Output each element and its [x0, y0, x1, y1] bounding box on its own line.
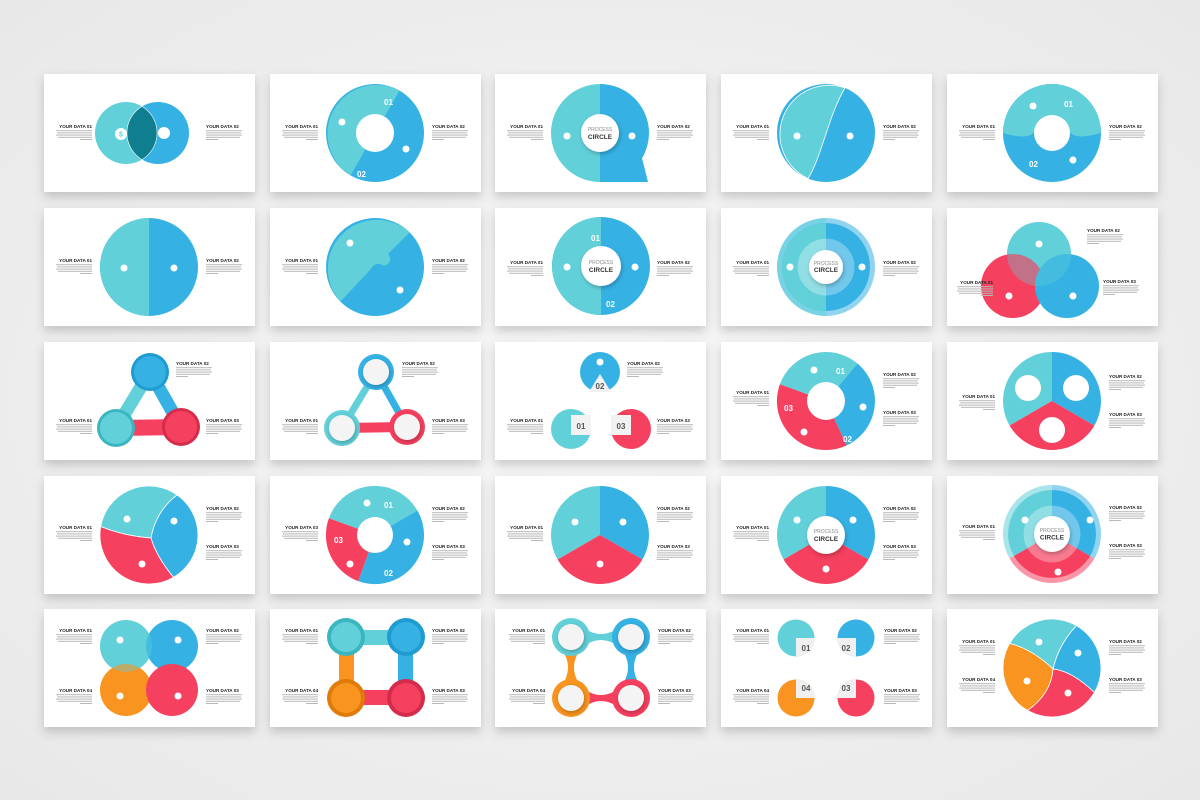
slide 17: three-part donut steps: [270, 476, 481, 594]
chart: [324, 354, 425, 446]
labels: [507, 260, 693, 276]
labels: [282, 628, 468, 704]
labels: YOUR DATA 03: [206, 688, 239, 693]
labels: YOUR DATA 02: [1109, 374, 1142, 379]
slide 23: four white-center circles connected: [495, 609, 706, 727]
chart: speech circle: [551, 84, 649, 182]
labels: YOUR DATA 01: [736, 390, 769, 395]
chart: 01: [384, 501, 393, 510]
labels: YOUR DATA 02: [432, 124, 465, 129]
chart: CIRCLE: [589, 267, 614, 274]
chart: donut: 01: [1064, 100, 1073, 109]
labels: YOUR DATA 03: [1103, 279, 1136, 284]
labels: YOUR DATA 02: [402, 361, 435, 366]
labels: YOUR DATA 03: [432, 418, 465, 423]
labels: YOUR DATA 01: [510, 525, 543, 530]
labels: [959, 124, 1145, 140]
labels: YOUR DATA 02: [432, 258, 465, 263]
chart: [778, 620, 874, 716]
labels: YOUR DATA 01: [962, 524, 995, 529]
chart: PROCESS: [814, 261, 839, 267]
chart: CIRCLE: [814, 267, 839, 274]
labels: [56, 628, 242, 704]
labels: YOUR DATA 03: [883, 544, 916, 549]
slide 3: process circle with tail: [495, 74, 706, 192]
labels: YOUR DATA 02: [657, 124, 690, 129]
slide 9: ringed process circle: [721, 208, 932, 326]
slide 20: ringed three-part process circle: [947, 476, 1158, 594]
labels: YOUR DATA 02: [657, 260, 690, 265]
labels: [56, 506, 242, 560]
labels: YOUR DATA 02: [657, 506, 690, 511]
labels: YOUR DATA 03: [658, 688, 691, 693]
chart: diagonal split: [326, 218, 424, 316]
labels: YOUR DATA 02: [1109, 124, 1142, 129]
slide 8: process circle halves: [495, 208, 706, 326]
labels: YOUR DATA 02: [627, 361, 660, 366]
chart: s-curve circle: [777, 84, 875, 182]
labels: YOUR DATA 01: [960, 280, 993, 285]
slide 11: three connected circles: [44, 342, 255, 460]
labels: YOUR DATA 01: [962, 639, 995, 644]
labels: YOUR DATA 01: [736, 124, 769, 129]
chart: donut: 02: [357, 170, 366, 179]
chart: donut: 01: [384, 98, 393, 107]
labels: YOUR DATA 02: [432, 628, 465, 633]
labels: [509, 628, 694, 704]
labels: YOUR DATA 01: [510, 418, 543, 423]
slide 6: half circle: [44, 208, 255, 326]
labels: YOUR DATA 03: [1109, 677, 1142, 682]
labels: YOUR DATA 03: [206, 544, 239, 549]
slide 2: donut two steps: [270, 74, 481, 192]
labels: [733, 124, 919, 140]
chart: [552, 217, 650, 315]
labels: YOUR DATA 02: [883, 124, 916, 129]
chart: [327, 618, 425, 717]
labels: [959, 374, 1145, 428]
chart: halves: [100, 218, 198, 316]
chart: 02: [596, 382, 605, 391]
labels: YOUR DATA 01: [736, 260, 769, 265]
chart: donut: 02: [1029, 160, 1038, 169]
labels: [733, 506, 919, 560]
chart: [1003, 485, 1101, 583]
labels: [56, 258, 242, 274]
labels: YOUR DATA 01: [285, 628, 318, 633]
labels: YOUR DATA 01: [285, 418, 318, 423]
labels: YOUR DATA 03: [1109, 543, 1142, 548]
slide 4: S split circle: [721, 74, 932, 192]
chart: 02: [843, 435, 852, 444]
chart: [777, 486, 875, 584]
labels: YOUR DATA 02: [206, 258, 239, 263]
labels: YOUR DATA 01: [510, 124, 543, 129]
chart: 01: [577, 422, 586, 431]
chart: 03: [784, 404, 793, 413]
labels: YOUR DATA 03: [883, 410, 916, 415]
labels: YOUR DATA 04: [59, 688, 92, 693]
labels: YOUR DATA 01: [962, 394, 995, 399]
slide 25: four-part wavy pie: [947, 609, 1158, 727]
chart: donut: [326, 84, 424, 182]
labels: [56, 124, 242, 140]
chart: [552, 618, 650, 717]
chart: 04: [802, 684, 811, 693]
chart: [777, 352, 875, 450]
slide 1: two circle venn: [44, 74, 255, 192]
labels: YOUR DATA 02: [883, 260, 916, 265]
chart: 03: [334, 536, 343, 545]
labels: YOUR DATA 02: [206, 124, 239, 129]
chart: 01: [802, 644, 811, 653]
slide 15: three-part pie with icons: [947, 342, 1158, 460]
chart: 03: [617, 422, 626, 431]
labels: YOUR DATA 01: [59, 258, 92, 263]
labels: YOUR DATA 03: [1109, 412, 1142, 417]
icons: [1024, 638, 1082, 696]
labels: YOUR DATA 01: [59, 418, 92, 423]
labels: YOUR DATA 03: [432, 544, 465, 549]
chart: 01: [591, 234, 600, 243]
labels: YOUR DATA 03: [285, 525, 318, 530]
labels: YOUR DATA 02: [176, 361, 209, 366]
chart: 03: [842, 684, 851, 693]
chart: [100, 620, 198, 716]
chart: 02: [384, 569, 393, 578]
labels: [733, 260, 919, 276]
labels: [282, 361, 468, 434]
slide 16: wavy three-part pie: [44, 476, 255, 594]
icons: [124, 516, 178, 568]
labels: YOUR DATA 01: [59, 124, 92, 129]
chart: PROCESS: [814, 529, 839, 535]
labels: [507, 506, 693, 560]
labels: YOUR DATA 02: [206, 506, 239, 511]
labels: YOUR DATA 01: [512, 628, 545, 633]
labels: YOUR DATA 01: [285, 258, 318, 263]
labels: YOUR DATA 02: [1109, 505, 1142, 510]
slide 22: four connected circles: [270, 609, 481, 727]
labels: YOUR DATA 02: [1109, 639, 1142, 644]
chart: [551, 486, 649, 584]
labels: YOUR DATA 04: [962, 677, 995, 682]
chart: [981, 222, 1099, 318]
chart: [100, 486, 198, 584]
chart: [551, 352, 651, 449]
chart: venn two circles: $: [119, 132, 123, 138]
labels: YOUR DATA 03: [657, 544, 690, 549]
labels: [507, 124, 693, 140]
slide 18: three-part pie: [495, 476, 706, 594]
labels: YOUR DATA 01: [736, 525, 769, 530]
labels: YOUR DATA 02: [206, 628, 239, 633]
labels: YOUR DATA 01: [736, 628, 769, 633]
labels: YOUR DATA 02: [883, 372, 916, 377]
chart: [1003, 619, 1101, 717]
slide 5: donut top/bottom: [947, 74, 1158, 192]
labels: YOUR DATA 02: [432, 506, 465, 511]
chart: speech circle: PROCESS: [588, 127, 613, 133]
chart: [1003, 352, 1101, 450]
labels: [282, 506, 468, 560]
labels: YOUR DATA 02: [884, 628, 917, 633]
labels: [733, 372, 919, 426]
labels: YOUR DATA 04: [736, 688, 769, 693]
chart: [777, 218, 875, 316]
chart: CIRCLE: [814, 536, 839, 543]
labels: [959, 639, 1145, 693]
slide 14: three-part donut: [721, 342, 932, 460]
labels: YOUR DATA 02: [883, 506, 916, 511]
labels: [733, 628, 920, 704]
chart: PROCESS: [1040, 528, 1065, 534]
chart: [326, 486, 424, 584]
labels: [507, 361, 693, 434]
slide 10: three circle venn: [947, 208, 1158, 326]
labels: [282, 258, 468, 274]
chart: 02: [606, 300, 615, 309]
labels: YOUR DATA 01: [510, 260, 543, 265]
labels: YOUR DATA 03: [884, 688, 917, 693]
labels: [959, 505, 1145, 559]
slide 24: four separate step circles: [721, 609, 932, 727]
chart: donut: [1003, 84, 1101, 182]
slide 7: puzzle diagonal: [270, 208, 481, 326]
labels: YOUR DATA 01: [962, 124, 995, 129]
labels: YOUR DATA 04: [285, 688, 318, 693]
labels: [957, 228, 1139, 296]
labels: YOUR DATA 01: [59, 628, 92, 633]
labels: YOUR DATA 03: [657, 418, 690, 423]
slide 19: three-part pie process circle: [721, 476, 932, 594]
labels: YOUR DATA 01: [59, 525, 92, 530]
chart: CIRCLE: [1040, 534, 1065, 542]
labels: YOUR DATA 01: [285, 124, 318, 129]
slide 12: three connected white-center circles: [270, 342, 481, 460]
chart: venn two circles: [95, 102, 189, 164]
labels: YOUR DATA 03: [432, 688, 465, 693]
chart: speech circle: CIRCLE: [588, 134, 613, 141]
labels: YOUR DATA 02: [658, 628, 691, 633]
chart: 02: [842, 644, 851, 653]
labels: [56, 361, 242, 434]
labels: YOUR DATA 02: [1087, 228, 1120, 233]
chart: PROCESS: [589, 260, 614, 266]
labels: YOUR DATA 03: [206, 418, 239, 423]
chart: [97, 353, 200, 447]
labels: YOUR DATA 04: [512, 688, 545, 693]
chart: 01: [836, 367, 845, 376]
slide 13: three separate circles with steps: [495, 342, 706, 460]
slide 21: four circle venn: [44, 609, 255, 727]
labels: [282, 124, 468, 140]
